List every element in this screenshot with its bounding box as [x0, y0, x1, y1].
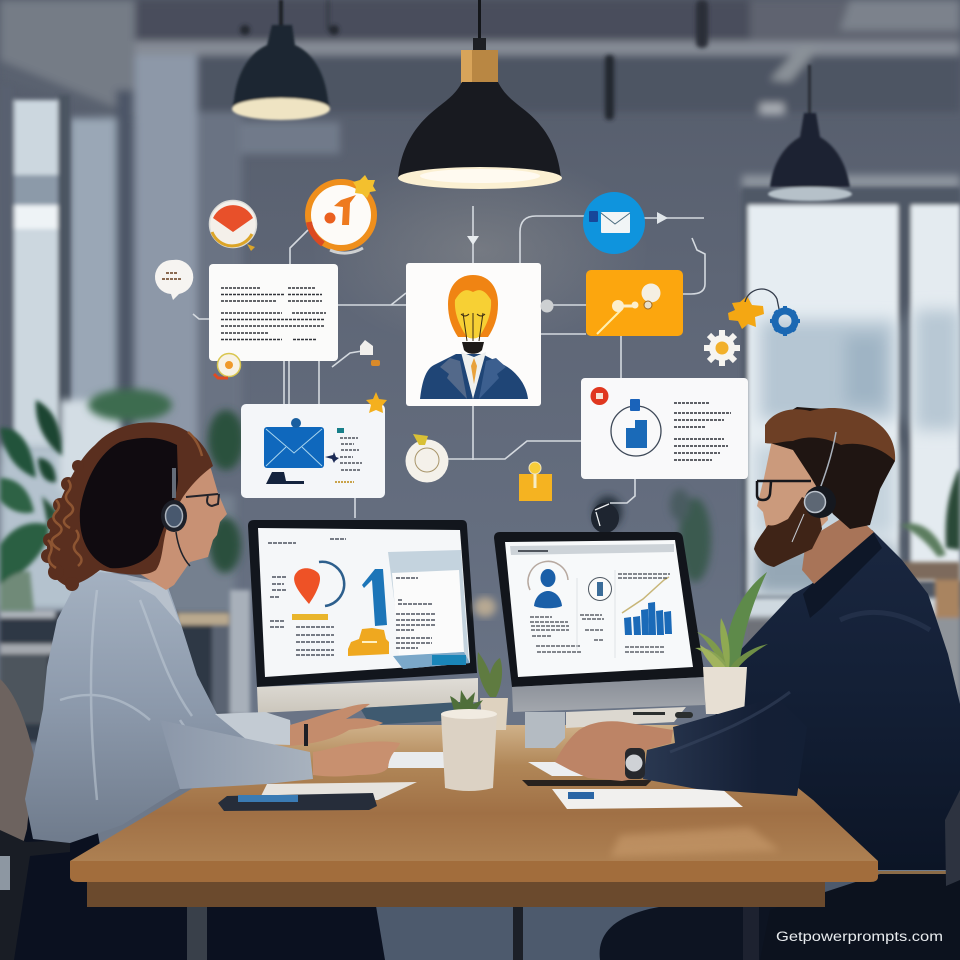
plant: behind monitors [474, 597, 508, 730]
icon: speech bubble [155, 260, 193, 300]
face [757, 440, 828, 560]
left window [0, 85, 70, 465]
card: chart panel right [581, 378, 748, 479]
icon: blue gear [770, 306, 800, 336]
background plants [0, 389, 960, 611]
card: orange process panel [586, 270, 683, 336]
main pendant lamp [398, 0, 562, 189]
icon: yellow star gear [728, 289, 779, 329]
card: portrait with light bulb head [406, 263, 541, 406]
man torso [693, 530, 960, 870]
hair curls [41, 460, 84, 591]
connector lines [193, 206, 705, 518]
icon: orange stamp [348, 628, 389, 656]
neck and face [140, 455, 227, 590]
glow beneath lamp [310, 150, 650, 350]
icon: red envelope badge [210, 200, 256, 251]
icon: heart gauge [294, 562, 344, 606]
headset [818, 432, 836, 494]
ceiling lamps and fixtures [232, 0, 852, 201]
chair: woman's [0, 679, 70, 960]
icon: orange target badge [308, 175, 376, 253]
icon: orange star [366, 392, 387, 413]
watermark: Getpowerprompts.com [776, 929, 943, 944]
floor and legs beneath table [0, 790, 960, 960]
plant cup on table [441, 690, 497, 791]
woman torso [25, 572, 313, 843]
bar chart [624, 602, 672, 635]
chair: man's [760, 790, 960, 960]
arrowhead: top centre [467, 236, 479, 245]
icon: small orange badge [214, 354, 240, 378]
woman head [41, 422, 227, 591]
right window [742, 188, 960, 608]
icon: dark pendant marker [591, 503, 619, 533]
beard [754, 497, 822, 567]
neck [802, 512, 874, 584]
table [70, 725, 878, 907]
card: email panel [241, 404, 385, 498]
trend line [622, 577, 669, 613]
icon: yellow badge with bulb [519, 462, 552, 501]
arrowhead: right of mail [657, 212, 668, 224]
plant: right potted [695, 572, 768, 714]
distant desks [0, 590, 250, 742]
icon: money badge [588, 578, 612, 600]
left monitor [248, 520, 478, 725]
right monitor [494, 532, 705, 748]
man head [754, 407, 895, 584]
card: text panel top left [209, 264, 338, 361]
headset [172, 468, 176, 498]
glasses [186, 494, 219, 506]
icon: grey plug on connector [540, 300, 554, 312]
glasses [757, 481, 811, 500]
icon: user circle [528, 561, 568, 608]
icon: bulb circle [406, 434, 448, 482]
icon: blue mail circle [583, 192, 645, 254]
man arms and hands [555, 692, 807, 796]
woman arms and hands [160, 704, 400, 789]
hair [47, 422, 213, 586]
icon: small house marker [360, 340, 380, 366]
desk items: papers and tablet [218, 752, 743, 811]
icon: white gear [704, 330, 740, 366]
icon: blue numeral 1 [362, 569, 387, 626]
hair [765, 407, 895, 529]
blurred window glare behind left plants [0, 400, 235, 615]
